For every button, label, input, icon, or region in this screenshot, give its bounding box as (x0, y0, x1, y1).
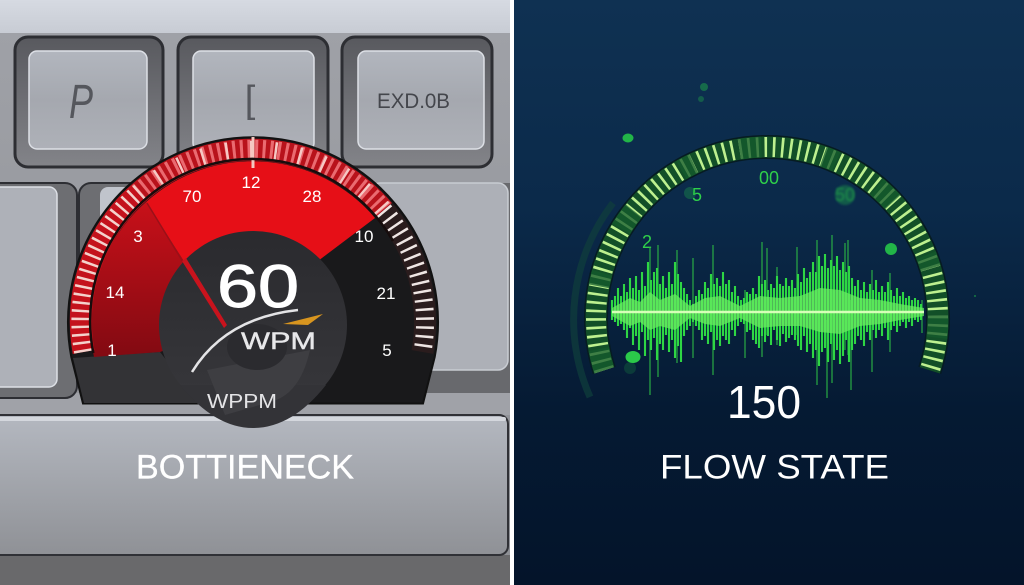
bright red sector (146, 161, 375, 327)
scale numbers green: 00 (759, 168, 779, 188)
scale numbers: 3 (133, 227, 143, 246)
needle red (182, 258, 227, 328)
panel: bottleneck keyboard (0, 0, 530, 585)
scale numbers: 28 (303, 187, 321, 206)
waveform (612, 235, 924, 398)
gauge: green (574, 83, 976, 398)
hub (159, 231, 347, 428)
key: second row centre (79, 183, 199, 283)
scale numbers green: 5 (692, 185, 702, 205)
faint outer arc (574, 203, 613, 397)
gauge: red speedometer (68, 137, 438, 428)
scale numbers: 1 (107, 341, 117, 360)
lower left band (73, 352, 200, 403)
key: escape label (342, 37, 492, 167)
key: P: P (69, 76, 93, 129)
scale numbers: 10 (355, 227, 373, 246)
key: P (15, 37, 163, 167)
value 60: 60 (217, 253, 299, 320)
scale numbers: 70 (183, 187, 201, 206)
scale numbers (106, 173, 395, 360)
waveform body (612, 254, 921, 366)
dark red sector (91, 202, 226, 357)
scale numbers: 12 (242, 173, 260, 192)
heading: bottleneck: BOTTIENECK (136, 448, 354, 486)
silver needle (192, 310, 298, 372)
scale numbers green: 2 (642, 232, 652, 252)
key: second row left (0, 183, 77, 398)
waveform inner brightness (612, 288, 924, 334)
lower WPM label: WPPM (207, 391, 277, 413)
scale numbers green: 50 (835, 185, 855, 205)
waveform tall spikes (650, 235, 922, 398)
scale numbers: 21 (377, 284, 395, 303)
scale numbers green (642, 168, 855, 252)
waveform centre line (612, 311, 924, 313)
needle shaft (147, 203, 183, 262)
key: bracket: [ (245, 79, 256, 121)
WPM label: WPM (241, 328, 316, 355)
value 150: 150 (727, 376, 801, 428)
heading: flow state: FLOW STATE (660, 448, 889, 486)
orange accent (283, 314, 323, 325)
scale numbers: 14 (106, 283, 124, 302)
key: large space bar (0, 415, 508, 555)
panel: flow state (514, 0, 1024, 585)
particles (622, 83, 976, 374)
scale numbers: 5 (382, 341, 392, 360)
gauge body (68, 137, 438, 404)
tick ring green (596, 147, 938, 370)
divider (510, 0, 514, 585)
tick ring (81, 137, 425, 353)
key: escape label: EXD.0B (377, 90, 450, 113)
key: second row right (360, 183, 530, 393)
waveform centre glow (612, 310, 924, 314)
key: bracket (178, 37, 328, 167)
